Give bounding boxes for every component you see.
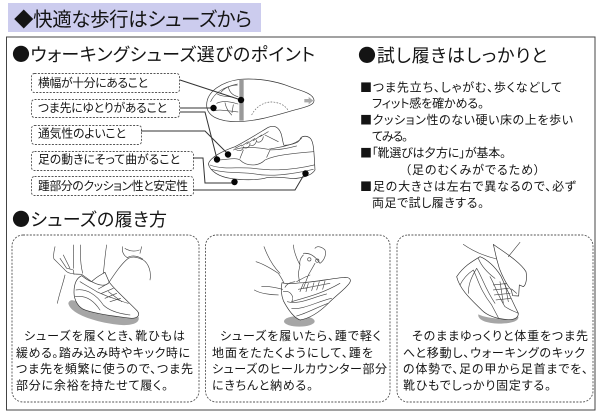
- text block: try-on bullet list: 両足で試し履きする。: [372, 196, 484, 210]
- step 3 text: の体勢で、足の甲から足首までを、: [403, 361, 588, 376]
- label: flex: 足の動きにそって曲がること: [38, 152, 180, 166]
- illustration: tightening laces: [457, 242, 527, 324]
- label: width: 横幅が十分にあること: [38, 76, 148, 90]
- illustration: tapping heel: [254, 245, 350, 327]
- step 1 text: 緩める。踏み込み時やキック時に: [16, 346, 190, 360]
- panel: step 2: [206, 235, 390, 402]
- step 2 text: にきちんと納める。: [212, 378, 313, 392]
- label: toe room: つま先にゆとりがあること: [38, 101, 167, 115]
- label: width: [32, 74, 180, 92]
- label: heel cushioning: [32, 176, 194, 196]
- step 1 text: つま先を頻繁に使うので、つま先: [16, 361, 193, 376]
- label: breathability: 通気性のよいこと: [38, 126, 126, 140]
- text block: try-on bullet list: フィット感を確かめる。: [372, 96, 484, 110]
- text block: try-on bullet list: ■「靴選びは夕方に」が基本。: [360, 144, 506, 161]
- step 3 text: へと移動し、ウォーキングのキック: [403, 346, 585, 360]
- heading: walking shoes selection points: ●ウォーキングシューズ選びのポイント: [12, 41, 315, 67]
- panel: step 3: [397, 235, 593, 402]
- text block: try-on bullet list: てみる。: [372, 130, 408, 144]
- leader lines: [141, 80, 305, 190]
- step 2 text: シューズを履いたら、踵で軽く: [220, 328, 381, 343]
- step 1 text: シューズを履くとき、靴ひもは: [24, 328, 185, 343]
- label: breathability: [32, 126, 142, 144]
- text block: try-on bullet list: ■つま先立ち、しゃがむ、歩くなどして: [360, 78, 562, 96]
- step 2 text: シューズのヒールカウンター部分: [212, 361, 387, 376]
- heading: try-on: ●試し履きはしっかりと: [358, 42, 547, 68]
- label: flex: [32, 152, 194, 170]
- label: heel cushioning: 踵部分のクッション性と安定性: [38, 179, 188, 193]
- illustration: shoe side view: [208, 126, 315, 180]
- step 1 text: [16, 328, 193, 392]
- heading: how to wear: ●シューズの履き方: [12, 206, 167, 232]
- step 2 text: [212, 328, 387, 392]
- step 2 text: 地面をたたくようにして、踵を: [212, 346, 373, 360]
- text block: try-on bullet list: ■クッション性のない硬い床の上を歩い: [360, 111, 573, 128]
- panel: step 1: [12, 235, 199, 402]
- callout dots: [210, 97, 309, 185]
- panel: selection point labels: [32, 74, 194, 196]
- step 1 text: 部分に余裕を持たせて履く。: [16, 378, 168, 392]
- step 3 text: そのままゆっくりと体重をつま先: [412, 329, 588, 343]
- label: toe room: [32, 100, 180, 118]
- title banner: ◆快適な歩行はシューズから: [14, 3, 252, 32]
- text block: try-on bullet list: ■足の大きさは左右で異なるので、必ず: [360, 178, 577, 194]
- step 3 text: [403, 329, 588, 392]
- text block: try-on bullet list: [360, 78, 577, 210]
- text block: try-on bullet list: （足のむくみがでるため）: [405, 162, 540, 177]
- step 3 text: 靴ひもでしっかり固定する。: [403, 378, 551, 392]
- illustration: shoe sole: [207, 79, 314, 122]
- illustration: tying laces: [53, 245, 150, 325]
